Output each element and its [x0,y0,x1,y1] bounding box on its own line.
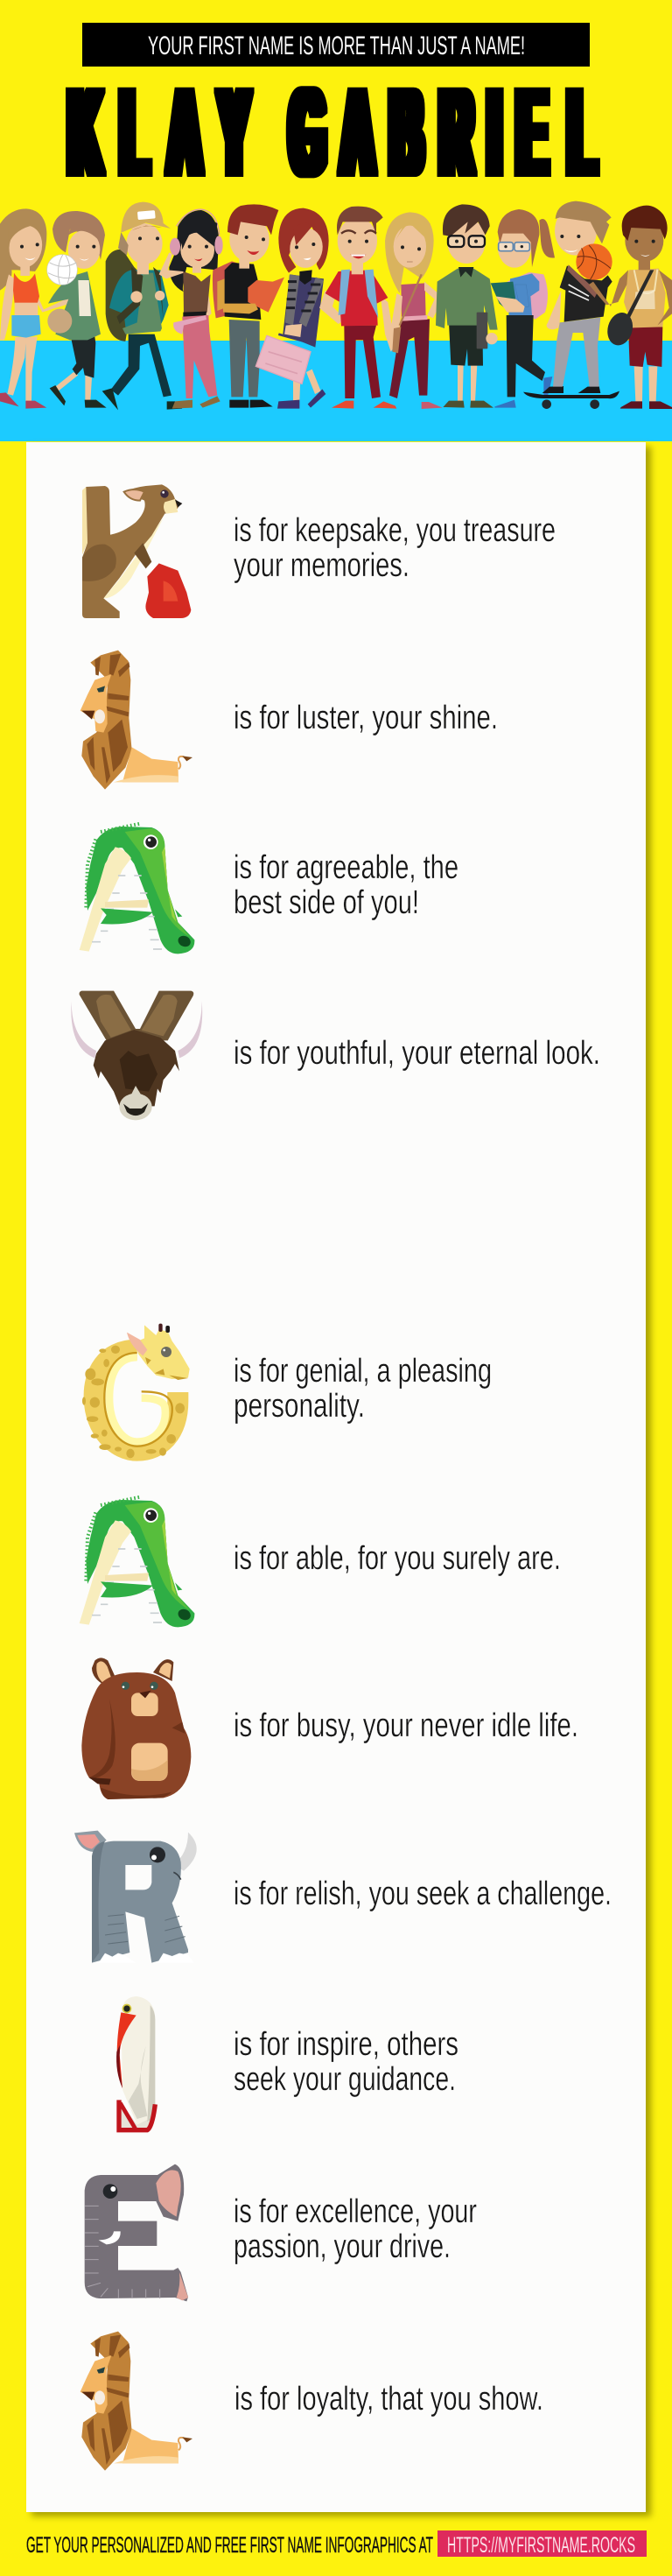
crowd of people [0,201,672,410]
person 12 with jersey [576,206,672,409]
person 5 with book [213,204,284,408]
icon: rhino letter R [74,1831,197,1963]
text: genial [234,1353,492,1425]
people group right [436,201,672,409]
icon: yak letter V [71,991,202,1120]
text: keepsake [234,512,556,584]
icon: kangaroo letter K [82,484,191,618]
person 4 with headphones [159,209,223,409]
person 6 with pink bag [256,208,329,409]
text: busy: is for busy, your never idle life. [234,1707,578,1744]
row B [81,1658,578,1799]
text: excellence: passion, your drive. [234,2228,451,2265]
row V [71,991,600,1120]
icon: bear letter B [81,1658,191,1799]
row I [116,1996,458,2130]
text: agreeable [234,849,458,921]
text: loyalty: is for loyalty, that you show. [234,2381,543,2418]
text: inspire: is for inspire, others [234,2026,458,2063]
person 7 in red shirt [319,207,396,409]
row A [80,824,458,954]
text: able: is for able, for you surely are. [234,1540,561,1577]
text: agreeable: is for agreeable, the [234,849,458,886]
person 10 with ponytail [491,209,555,408]
icon: lion letter L [80,651,192,790]
text: inspire [234,2026,458,2098]
icon: giraffe letter G [82,1324,190,1458]
icon: elephant letter E [85,2164,188,2301]
row L [80,651,498,790]
text: genial: is for genial, a pleasing [234,1353,492,1390]
text: luster: is for luster, your shine. [234,700,498,736]
row A second [80,1497,561,1627]
footer [26,2530,647,2558]
title: KLAY GABRIEL [69,65,596,201]
tagline bar [82,23,590,67]
row L second [80,2332,543,2471]
person 3 with backpack [102,202,182,410]
text: excellence [234,2193,477,2265]
text: genial: personality. [234,1388,365,1425]
icon: stork letter I [116,1996,155,2130]
text: agreeable: best side of you! [234,884,419,921]
person 2 with volleyball [47,211,107,408]
icon: lion letter L [80,2332,192,2471]
icon: crocodile letter A [80,1497,194,1627]
icon: crocodile letter A [80,824,194,954]
person 8 blonde [385,212,444,409]
person 1 [0,208,70,409]
row G [82,1324,492,1458]
row K [82,484,556,618]
text: excellence: is for excellence, your [234,2193,477,2230]
white content panel [26,442,651,2516]
text: keepsake: is for keepsake, you treasure [234,512,556,549]
row R [74,1831,612,1963]
row E [85,2164,477,2301]
person 11 on skateboard [523,201,620,409]
text: inspire: seek your guidance. [234,2061,456,2098]
person 9 with glasses [436,204,498,408]
text: keepsake: your memories. [234,547,410,584]
blue floor band [0,341,672,441]
people group middle [213,204,444,409]
people group left [0,202,223,410]
